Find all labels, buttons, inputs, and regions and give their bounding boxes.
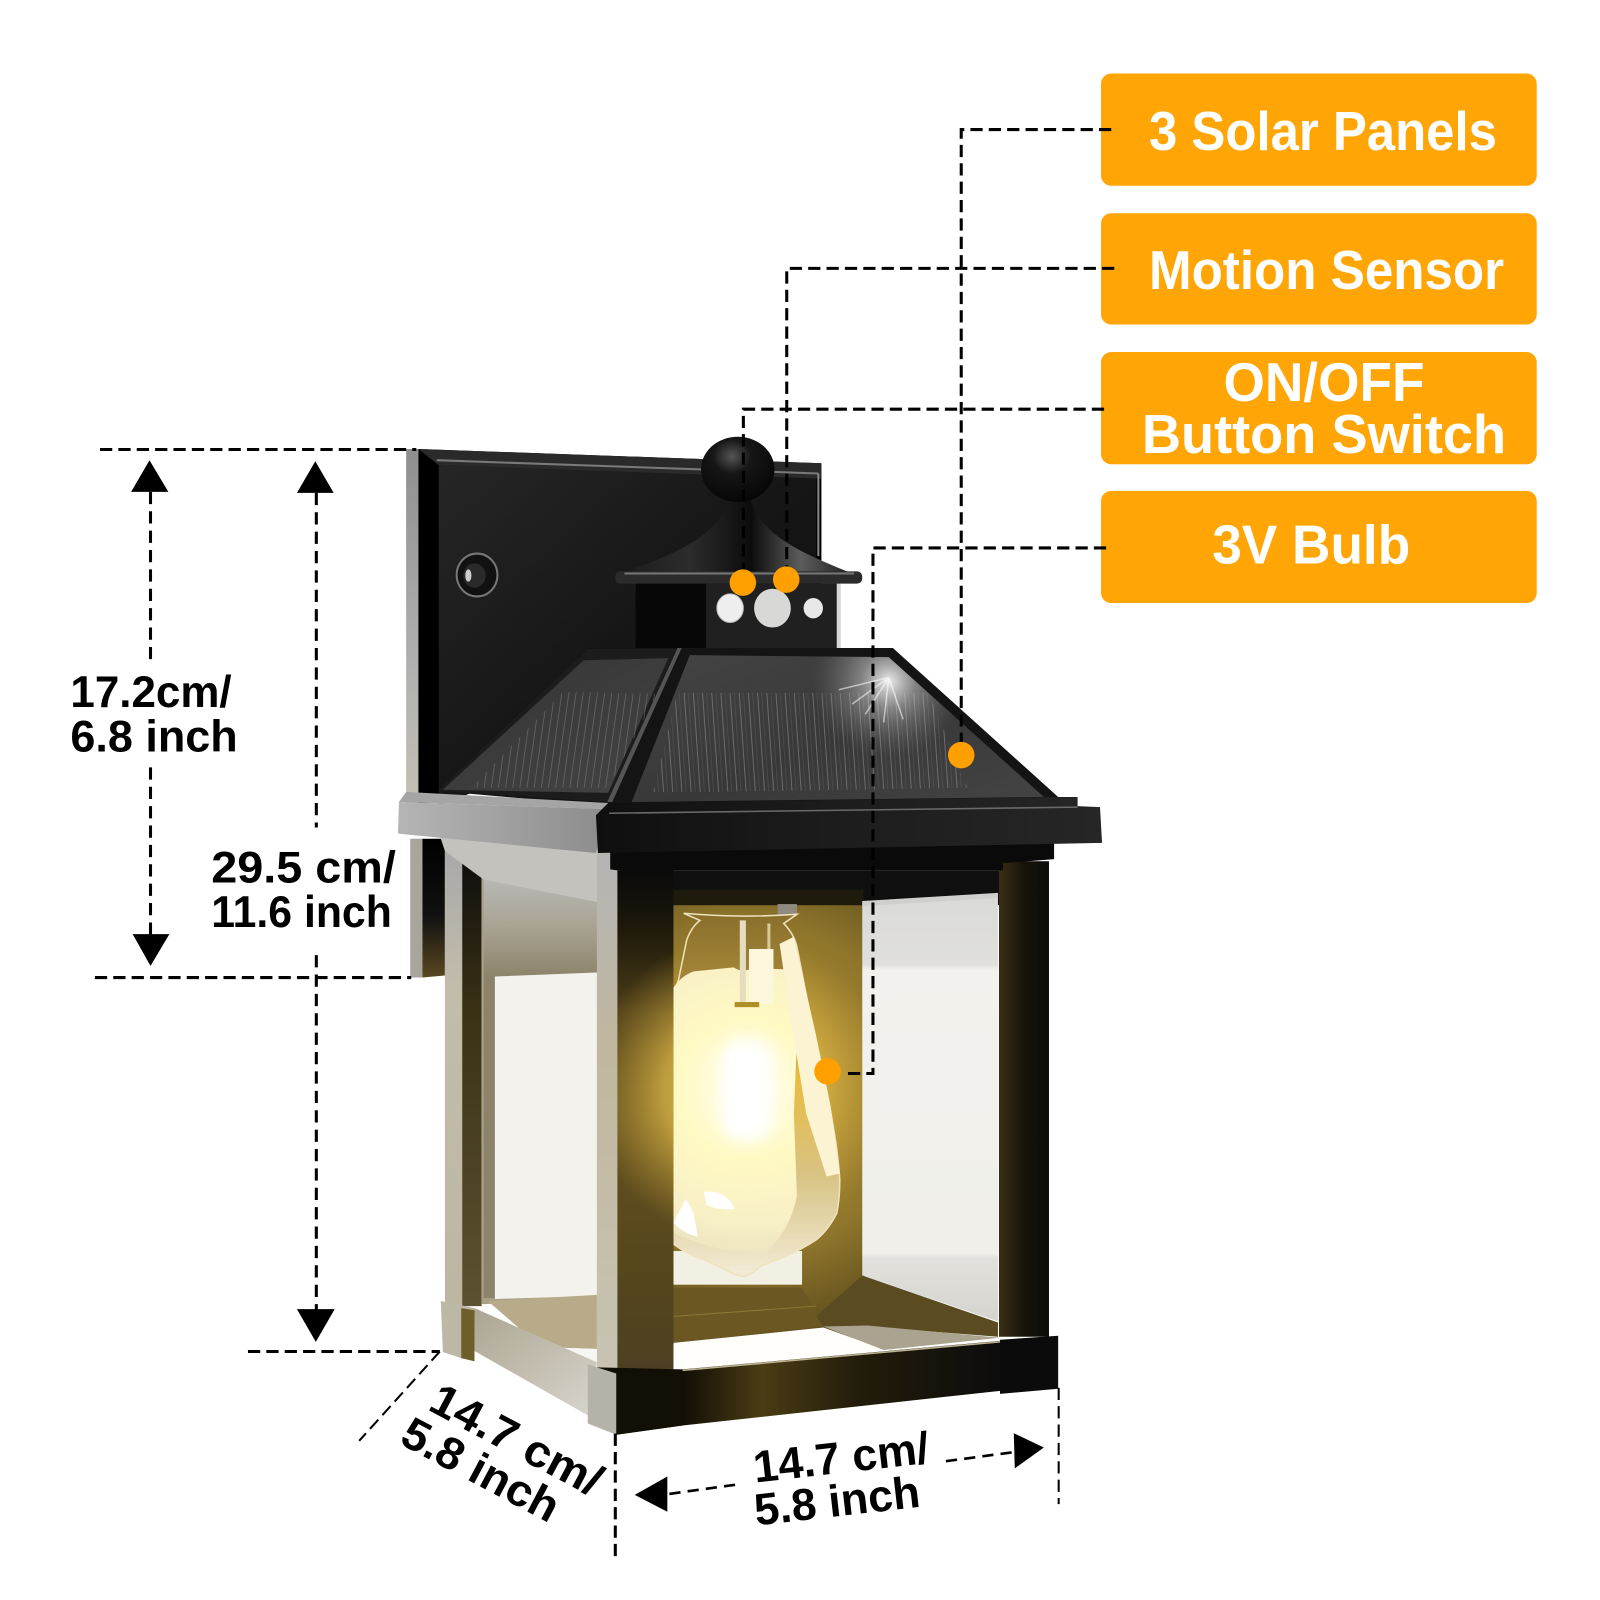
sun glare [822,656,948,748]
dimension: backplate height 17.2 cm: 17.2cm/ [70,666,232,717]
bulb socket [778,904,797,916]
roof frame [438,648,1078,806]
dimension: depth 14.7 cm: 5.8 inch [393,1407,569,1532]
callout: 3V Bulb [1101,491,1537,603]
callout connector lines [743,130,1114,1073]
callout: 3 Solar Panels: 3 Solar Panels [1149,100,1497,162]
base frame [441,1301,1058,1435]
dimension: depth 14.7 cm [393,1373,612,1532]
roof band [398,792,1102,870]
cupola body [636,584,840,649]
finial ball [701,437,774,502]
dimension guide lines [95,449,1059,1559]
left solar panel [443,658,668,793]
cupola with finial [615,437,862,649]
dimension: backplate height 17.2 cm: 6.8 inch [70,711,238,762]
glow halo [674,966,862,1180]
right glass pane [816,893,998,1337]
backplate [406,449,821,978]
dimension: width 14.7 cm [635,1422,1044,1535]
connector: solar panels [961,130,1111,743]
front and right posts [587,847,1049,1374]
callout: ON/OFF Button Switch: Button Switch [1142,403,1506,465]
front solar panel [632,655,1044,802]
left side wall of lantern [439,833,617,1365]
sensors [717,589,823,628]
dimension: backplate height 17.2 cm [70,460,238,966]
back wall interior [670,870,1003,1344]
callout: 3V Bulb: 3V Bulb [1212,513,1410,575]
bright inner glass [673,967,797,1253]
callout: 3 Solar Panels [1101,73,1537,186]
dimension: width 14.7 cm: 5.8 inch [751,1466,923,1535]
glowing bulb [674,904,862,1278]
callout: Motion Sensor [1101,213,1537,324]
callout: ON/OFF Button Switch: ON/OFF [1223,351,1424,413]
dimension: total height 29.5 cm: 29.5 cm/ [211,842,396,893]
right reflection [780,937,840,1177]
callout: Motion Sensor: Motion Sensor [1149,239,1504,301]
solar roof [438,648,1078,806]
callout: ON/OFF Button Switch [1101,351,1537,465]
mounting screw [457,554,497,596]
cupola brim [615,571,862,584]
cone roof [617,498,862,578]
dimension: depth 14.7 cm: 14.7 cm/ [422,1373,612,1506]
bulb glass [668,913,840,1277]
filament stem [740,920,746,1006]
lantern product illustration [398,437,1102,1435]
lower reflections [673,1192,735,1237]
connector: motion sensor [787,268,1114,567]
dimension: width 14.7 cm: 14.7 cm/ [750,1422,932,1493]
filament glow [721,1039,772,1141]
floor opening and tray [673,1326,1000,1370]
dimension: total height 29.5 cm [211,461,396,1342]
connector: on/off switch [743,409,1104,571]
dimension: total height 29.5 cm: 11.6 inch [211,886,392,937]
connector: bulb [843,548,1106,1073]
callout marker dots [730,566,974,1085]
